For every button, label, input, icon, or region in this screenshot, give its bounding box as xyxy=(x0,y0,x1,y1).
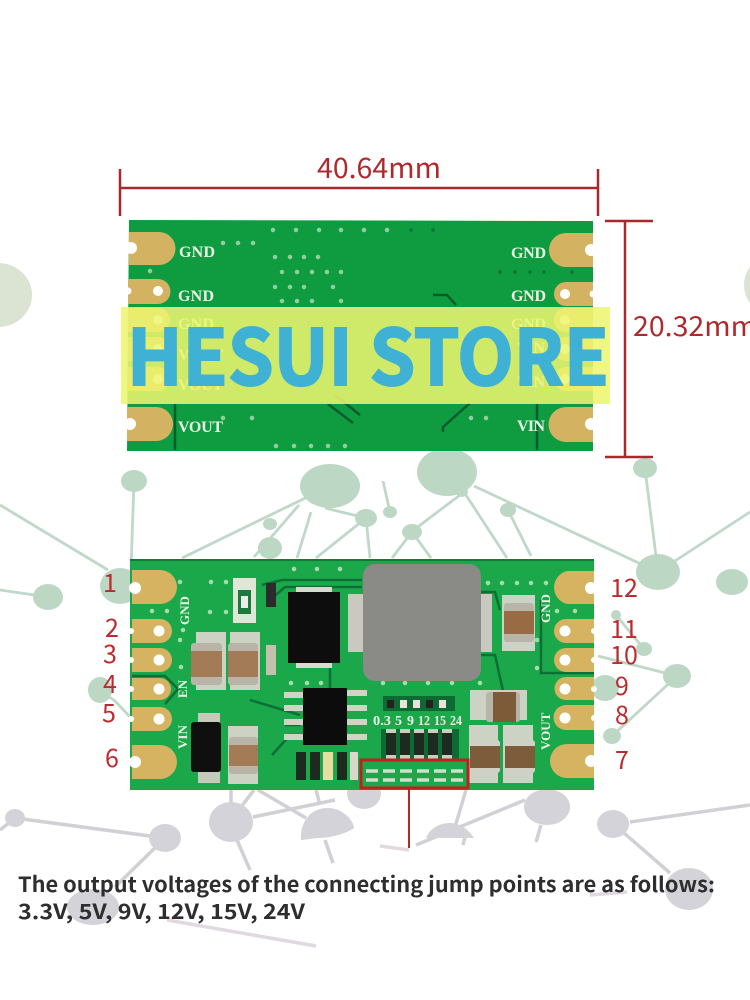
silkscreen labels on back side: GND xyxy=(511,316,546,333)
inductor pins xyxy=(348,594,366,652)
background network: green upper xyxy=(0,261,750,744)
silkscreen labels on back side: VIN xyxy=(517,374,545,391)
voltage silkscreen labels: 12 xyxy=(418,714,430,729)
callout: jump point box and leader line xyxy=(361,760,468,848)
pin numbers left: 2 xyxy=(105,609,119,645)
vias xyxy=(152,569,575,683)
power device xyxy=(288,587,340,668)
dimension: width 40.64mm xyxy=(120,147,598,216)
bottom PCB: component side xyxy=(128,560,597,790)
silkscreen: VIN: VIN xyxy=(175,725,190,749)
pin numbers left: 5 xyxy=(102,694,116,730)
silkscreen labels on back side: GND xyxy=(511,245,546,262)
silkscreen: VOUT: VOUT xyxy=(538,712,553,750)
silkscreen: GND left: GND xyxy=(177,596,192,625)
caption text: 3.3V, 5V, 9V, 12V, 15V, 24V xyxy=(18,896,306,926)
voltage silkscreen labels: 5 xyxy=(395,714,402,729)
pads on back side xyxy=(127,232,593,442)
voltage silkscreen labels: 24 xyxy=(450,714,462,729)
voltage silkscreen labels: 15 xyxy=(434,714,446,729)
voltage silkscreen labels: 0.3 xyxy=(373,714,391,729)
pin numbers right: 7 xyxy=(615,741,629,777)
dark via row xyxy=(411,230,572,272)
vias on back side xyxy=(150,230,486,446)
pin numbers left: 1 xyxy=(103,564,117,600)
voltage silkscreen labels: 9 xyxy=(407,714,414,729)
silkscreen labels on back side xyxy=(178,244,546,436)
jump point pads xyxy=(366,771,463,780)
pad holes and edge notches xyxy=(124,242,597,430)
top PCB: back side xyxy=(124,220,597,451)
silkscreen labels on back side: GND xyxy=(511,288,546,305)
control IC xyxy=(284,688,367,745)
silkscreen: EN: EN xyxy=(175,679,190,698)
pad holes and notches xyxy=(128,582,597,768)
pin numbers right: 10 xyxy=(610,636,638,672)
inductor xyxy=(363,564,481,681)
silkscreen labels on back side: VOUT xyxy=(178,419,223,436)
dimension: height 20.32mm: 20.32mm xyxy=(633,305,750,344)
pin numbers left xyxy=(102,564,119,775)
traces on back side xyxy=(175,295,537,450)
silkscreen labels on back side: VIN xyxy=(517,340,545,357)
solder pads xyxy=(132,570,594,779)
small SMD parts xyxy=(266,583,452,780)
silkscreen labels on back side: VIN xyxy=(517,418,545,435)
pin numbers left: 3 xyxy=(103,635,117,671)
caption text xyxy=(18,869,715,926)
silkscreen labels on back side: VOUT xyxy=(178,377,223,394)
voltage silkscreen labels xyxy=(373,714,462,729)
capacitors xyxy=(191,595,535,784)
silkscreen labels on back side: VOUT xyxy=(178,347,223,364)
pin numbers right: 9 xyxy=(615,667,629,703)
black diode xyxy=(191,713,221,783)
pin numbers right: 8 xyxy=(615,696,629,732)
silkscreen labels on back side: GND xyxy=(178,316,214,333)
silkscreen labels on back side: GND xyxy=(179,244,215,261)
background network: grey lower xyxy=(0,777,750,946)
dark ground areas near voltage selector xyxy=(381,696,459,759)
pin numbers right xyxy=(610,569,638,777)
silkscreen labels on back side: GND xyxy=(178,288,214,305)
dimension: width 40.64mm: 40.64mm xyxy=(317,147,441,187)
watermark banner: HESUI STORE xyxy=(127,297,609,408)
copper region traces xyxy=(132,580,594,755)
pin numbers left: 4 xyxy=(103,665,117,701)
dimension: height 20.32mm xyxy=(605,221,750,457)
caption text: The output voltages of the connecting jump points are as follows: xyxy=(18,869,715,899)
pin numbers right: 12 xyxy=(610,569,638,605)
status LED xyxy=(233,578,256,623)
silkscreen: GND right: GND xyxy=(538,594,553,623)
pin numbers right: 11 xyxy=(610,610,638,646)
pin numbers left: 6 xyxy=(105,739,119,775)
